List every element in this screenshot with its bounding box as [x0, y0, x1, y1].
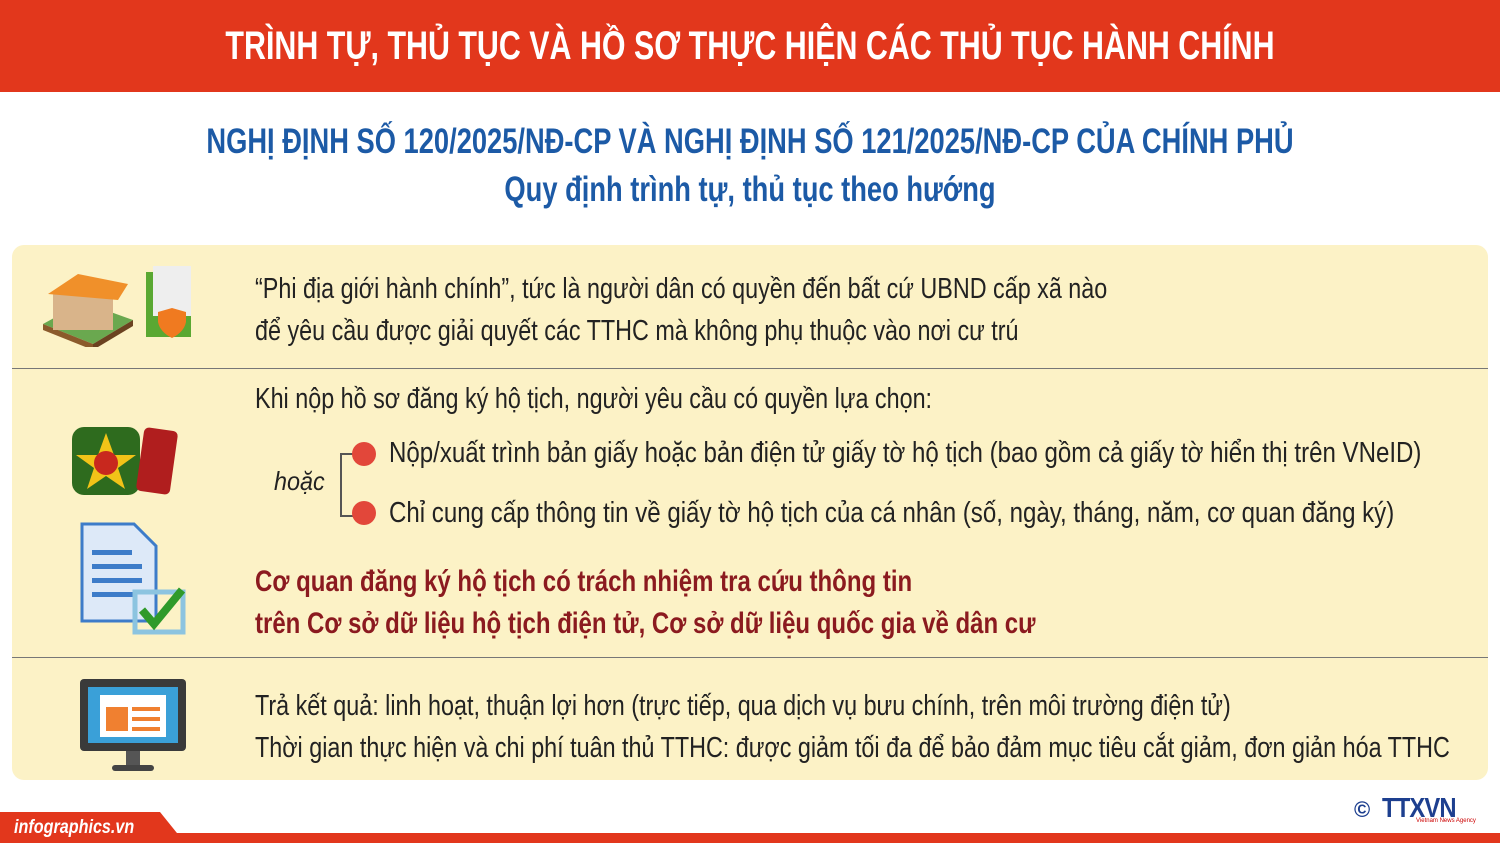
text block 3: Thời gian thực hiện và chi phí tuân thủ TTHC: được giảm tối đa để bảo đảm mục tiêu cắt giảm, đơn giản hóa TTHC	[255, 732, 1450, 764]
subtitle: Quy định trình tự, thủ tục theo hướng	[504, 170, 996, 209]
icon: document check	[80, 522, 186, 634]
title: TRÌNH TỰ, THỦ TỤC VÀ HỒ SƠ THỰC HIỆN CÁC THỦ TỤC HÀNH CHÍNH	[225, 24, 1275, 68]
icon: house and folder	[43, 266, 191, 347]
icon: monitor	[80, 679, 186, 771]
logo: TTXVN: TTXVN	[1382, 792, 1456, 823]
option 1: Nộp/xuất trình bản giấy hoặc bản điện tử giấy tờ hộ tịch (bao gồm cả giấy tờ hiển thị trên VNeID)	[389, 437, 1421, 469]
logo: TTXVN: Vietnam News Agency	[1416, 818, 1476, 824]
subtitle	[206, 121, 1294, 209]
hoac bracket: hoặc	[274, 466, 325, 496]
text block 1	[255, 273, 1107, 347]
text block 3: Trả kết quả: linh hoạt, thuận lợi hơn (trực tiếp, qua dịch vụ bưu chính, trên môi trường điện tử)	[255, 690, 1231, 722]
text block 1: để yêu cầu được giải quyết các TTHC mà không phụ thuộc vào nơi cư trú	[255, 315, 1018, 347]
option 2: Chỉ cung cấp thông tin về giấy tờ hộ tịch của cá nhân (số, ngày, tháng, năm, cơ quan đăng ký)	[389, 497, 1394, 529]
highlighted statement	[255, 565, 1036, 640]
hoac bracket	[274, 442, 376, 525]
header band	[0, 0, 1500, 92]
footer tab: infographics.vn	[0, 812, 177, 837]
text: options intro: Khi nộp hồ sơ đăng ký hộ tịch, người yêu cầu có quyền lựa chọn:	[255, 383, 932, 415]
text block 3	[255, 690, 1450, 764]
highlighted statement: Cơ quan đăng ký hộ tịch có trách nhiệm tra cứu thông tin	[255, 565, 912, 598]
logo: TTXVN	[1354, 792, 1476, 824]
logo: TTXVN: ©	[1354, 797, 1370, 822]
text block 1: “Phi địa giới hành chính”, tức là người dân có quyền đến bất cứ UBND cấp xã nào	[255, 273, 1107, 305]
highlighted statement: trên Cơ sở dữ liệu hộ tịch điện tử, Cơ sở dữ liệu quốc gia về dân cư	[255, 607, 1036, 640]
icon: VNeID	[72, 427, 178, 495]
footer tab: infographics.vn: infographics.vn	[14, 817, 134, 838]
main panel	[12, 245, 1488, 780]
subtitle: NGHỊ ĐỊNH SỐ 120/2025/NĐ-CP VÀ NGHỊ ĐỊNH SỐ 121/2025/NĐ-CP CỦA CHÍNH PHỦ	[206, 122, 1294, 161]
footer bar	[0, 833, 1500, 843]
